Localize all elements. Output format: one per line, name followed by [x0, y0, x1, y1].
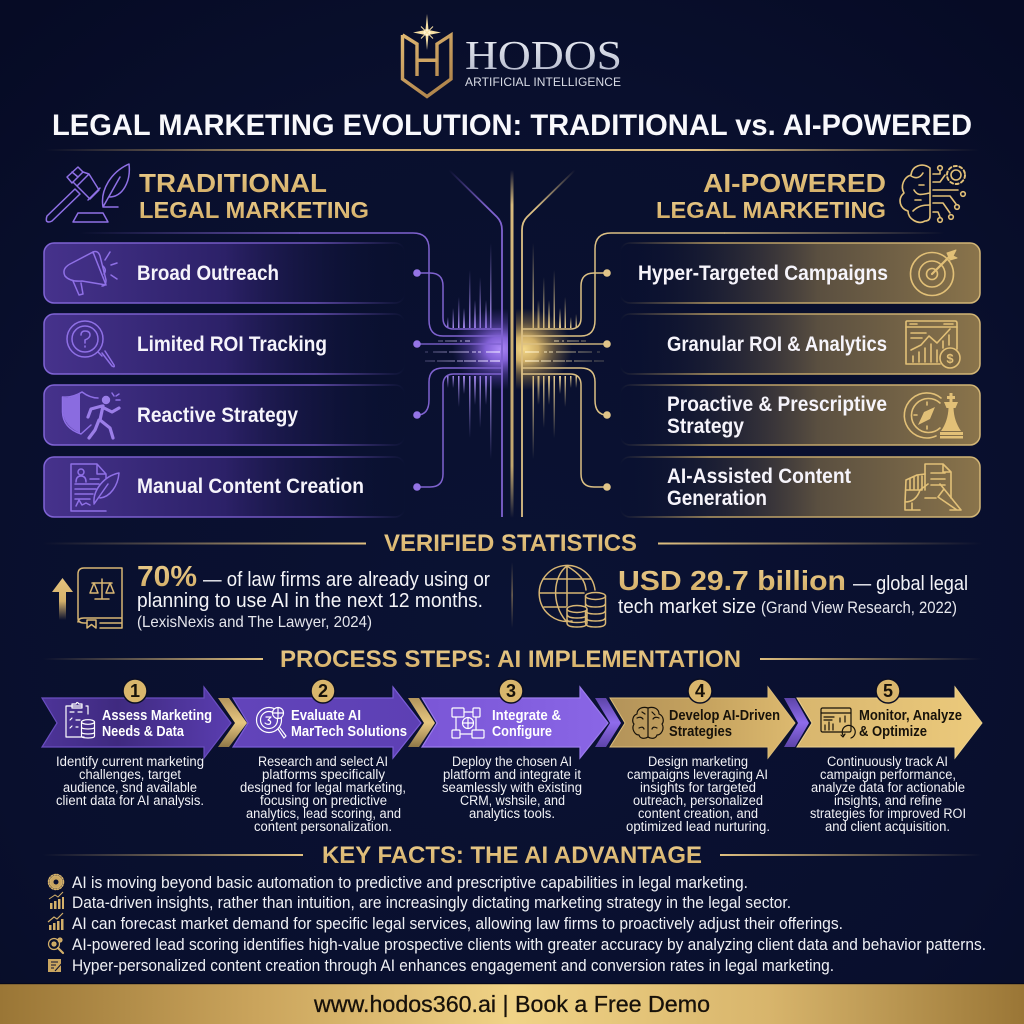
label: Limited ROI Tracking — [137, 333, 327, 356]
icon: megaphone — [64, 252, 117, 295]
data streaks — [425, 341, 604, 361]
icon: document and quill — [71, 464, 119, 511]
step description: optimized lead nurturing. — [626, 819, 770, 834]
statistic: USD 29.7 billion — [539, 565, 968, 627]
panel: Reactive Strategy — [44, 385, 405, 445]
step 2: MarTech Solutions — [291, 724, 407, 740]
panel: Manual Content Creation — [44, 457, 405, 517]
step description: Research and select AI — [258, 754, 388, 769]
icon: star above shield — [413, 14, 441, 50]
step 4 — [610, 679, 809, 834]
heading: AI-powered — [656, 165, 965, 223]
icon: shield H emblem — [402, 35, 451, 96]
chevron — [218, 698, 247, 747]
icon: magnifier and gear — [256, 708, 286, 738]
label: Reactive Strategy — [137, 404, 298, 427]
number badge: 1 — [130, 681, 140, 701]
step description — [240, 754, 406, 834]
icon: monitor dashboard — [821, 708, 855, 738]
icon: robot hand and human hand with document — [905, 464, 961, 510]
label line 1: AI-Assisted Content — [667, 465, 851, 488]
step description: insights for targeted — [640, 780, 756, 795]
chevron — [408, 698, 435, 747]
step description: campaign performance, — [820, 767, 956, 782]
step description: insights, and refine — [834, 793, 942, 808]
arrow 3 — [422, 687, 608, 758]
purple equalizer bars — [447, 243, 492, 328]
big number: USD 29.7 billion — [618, 565, 846, 596]
gold connectors — [522, 233, 944, 491]
panel: AI-Assisted Content Generation — [620, 457, 980, 517]
label: Broad Outreach — [137, 262, 279, 285]
step 3: Configure — [492, 724, 552, 740]
logo: Hodos Artificial Intelligence — [402, 14, 622, 96]
chevron — [595, 698, 621, 747]
footer text: www.hodos360.ai | Book a Free Demo — [313, 991, 710, 1017]
step description: and client acquisition. — [825, 819, 950, 834]
step description: strategies for improved ROI — [810, 806, 966, 821]
step 5 — [797, 679, 982, 834]
step title: Assess Marketing — [102, 708, 212, 724]
step description: campaigns leveraging AI — [627, 767, 768, 782]
step description: platform and integrate it — [443, 767, 581, 782]
step 1 — [42, 679, 247, 808]
heading line 1: AI-POWERED — [703, 168, 886, 198]
step description: focusing on predictive — [260, 793, 387, 808]
icon: gavel and quill — [46, 164, 129, 222]
icon: law book with scales — [78, 568, 122, 628]
logo wordmark: HODOS — [465, 32, 622, 78]
label: Granular ROI & Analytics — [667, 333, 887, 356]
arrow 4 — [610, 687, 795, 758]
purple connectors — [80, 233, 502, 491]
step description: analytics, lead scoring, and — [246, 806, 401, 821]
icon: shield and runner — [62, 392, 120, 438]
icon: compass and chess king — [904, 393, 963, 438]
label line 2: Strategy — [667, 415, 744, 438]
step description: platforms specifically — [262, 767, 385, 782]
statistic text line 2: tech market size — [618, 596, 756, 618]
number badge — [499, 679, 523, 703]
step description: content personalization. — [254, 819, 392, 834]
gold main trace — [522, 170, 575, 517]
statistic: 70 percent — [52, 561, 490, 631]
step 4: Strategies — [669, 724, 732, 740]
icon: globe with coins — [539, 565, 606, 627]
chevron — [784, 698, 809, 747]
number badge: 5 — [883, 681, 893, 701]
step description: audience, snd available — [63, 780, 197, 795]
heading: key facts: KEY FACTS: THE AI ADVANTAGE — [322, 842, 702, 869]
fact 2: Data-driven insights, rather than intuition, are increasingly dictating marketing strategy in the legal sector. — [72, 893, 791, 912]
heading line 2: LEGAL MARKETING — [139, 197, 369, 223]
number badge — [876, 679, 900, 703]
step description: Design marketing — [648, 754, 748, 769]
number badge — [688, 679, 712, 703]
icon: integration network — [452, 708, 484, 738]
heading: traditional — [46, 164, 369, 223]
step description: Continuously track AI — [827, 754, 948, 769]
key facts list — [48, 873, 986, 975]
fact 5: Hyper-personalized content creation through AI enhances engagement and conversion rates in legal marketing. — [72, 956, 834, 975]
step description: challenges, target — [79, 767, 181, 782]
heading line 2: LEGAL MARKETING — [656, 197, 886, 223]
step description: seamlessly with existing — [442, 780, 582, 795]
number badge — [311, 679, 335, 703]
fact 3: AI can forecast market demand for specific legal services, allowing law firms to proactively adjust their offerings. — [72, 914, 843, 933]
logo tagline: ARTIFICIAL INTELLIGENCE — [465, 75, 621, 89]
step description — [810, 754, 966, 834]
glow: gold core — [516, 305, 574, 393]
number badge: 3 — [506, 681, 516, 701]
purple equalizer bars lower — [447, 376, 492, 459]
step description — [56, 754, 204, 808]
panel: Hyper-Targeted Campaigns — [620, 243, 980, 303]
number badge — [123, 679, 147, 703]
step title: Integrate & — [492, 708, 561, 724]
label: Manual Content Creation — [137, 475, 364, 498]
icon: brain — [633, 707, 663, 738]
step description: analyze data for actionable — [811, 780, 965, 795]
step 3 — [422, 679, 621, 821]
step title: Develop AI-Driven — [669, 708, 780, 724]
step description: Identify current marketing — [56, 754, 204, 769]
arrow 1 — [42, 687, 231, 758]
label: Hyper-Targeted Campaigns — [638, 262, 888, 285]
gold equalizer bars lower — [532, 376, 577, 459]
statistic text line 1: — global legal — [853, 573, 968, 595]
heading line 1: TRADITIONAL — [139, 168, 327, 198]
statistic text line 2: planning to use AI in the next 12 months. — [137, 590, 483, 612]
footer banner — [0, 983, 1024, 1024]
step description: Deploy the chosen AI — [452, 754, 572, 769]
center gold divider — [510, 170, 514, 518]
central circuit graphic — [80, 170, 944, 518]
glow: purple core — [450, 305, 508, 393]
panel: Proactive and Prescriptive Strategy — [620, 385, 980, 445]
icon: analytics window with dollar: $ — [946, 351, 954, 366]
step description — [442, 754, 582, 821]
gold equalizer bars — [532, 243, 577, 328]
step 1: Needs & Data — [102, 724, 185, 740]
number badge: 2 — [318, 681, 328, 701]
step 5: & Optimize — [859, 724, 927, 740]
panel: Granular ROI and Analytics — [620, 314, 980, 374]
step description: CRM, wshsile, and — [460, 793, 565, 808]
icon: clipboard and database — [66, 702, 94, 738]
step title: Monitor, Analyze — [859, 708, 962, 724]
statistic text line 1: — of law firms are already using or — [203, 569, 490, 591]
step description: designed for legal marketing, — [240, 780, 406, 795]
step description: analytics tools. — [469, 806, 555, 821]
step 2 — [233, 679, 435, 834]
title: LEGAL MARKETING EVOLUTION: TRADITIONAL vs. AI-POWERED — [52, 109, 972, 142]
heading: process steps: PROCESS STEPS: AI IMPLEMENTATION — [280, 646, 741, 673]
arrow 5 — [797, 687, 982, 758]
panel: Broad Outreach — [44, 243, 405, 303]
fact 1: AI is moving beyond basic automation to predictive and prescriptive capabilities in legal marketing. — [72, 873, 748, 892]
icon: brain with circuits and gear — [900, 165, 965, 222]
step description: client data for AI analysis. — [56, 793, 204, 808]
arrow 2 — [233, 687, 421, 758]
icon: magnifier question — [67, 321, 114, 367]
heading: verified statistics: VERIFIED STATISTICS — [384, 530, 637, 557]
purple main trace — [449, 170, 502, 517]
icon: target with dart — [910, 250, 957, 296]
step description: content creation, and — [638, 806, 758, 821]
big number: 70% — [137, 561, 197, 593]
panel: Limited ROI Tracking — [44, 314, 405, 374]
number badge: 4 — [695, 681, 705, 701]
label line 2: Generation — [667, 487, 767, 510]
source: (Grand View Research, 2022) — [761, 598, 957, 617]
source: (LexisNexis and The Lawyer, 2024) — [137, 614, 372, 631]
step description: outreach, personalized — [633, 793, 763, 808]
step title: Evaluate AI — [291, 708, 361, 724]
icon: analytics window with dollar — [906, 321, 960, 368]
label line 1: Proactive & Prescriptive — [667, 393, 887, 416]
icon: up arrow — [52, 578, 73, 620]
step description — [626, 754, 770, 834]
